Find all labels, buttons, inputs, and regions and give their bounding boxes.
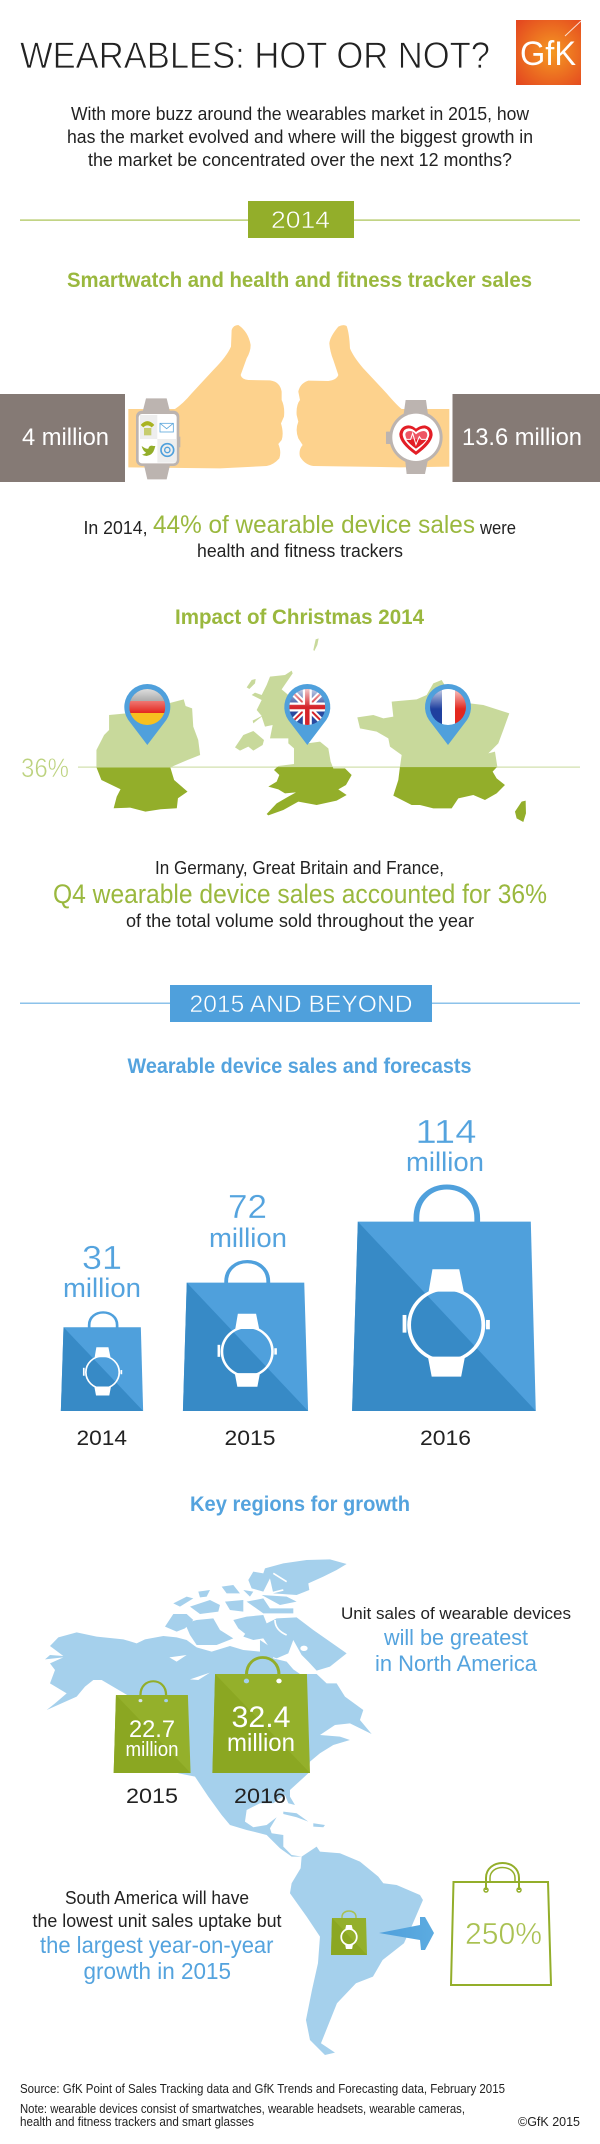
icon: right hand xyxy=(297,325,449,467)
bag: 32.4 million 2016: 2016 xyxy=(234,1785,286,1808)
bag: 22.7 million 2015: 22.7 xyxy=(129,1716,175,1743)
logo: GfK xyxy=(516,20,581,85)
label box: 13.6 million: 13.6 million xyxy=(462,424,582,451)
callout: 250% outline bag xyxy=(451,1863,551,1985)
text: South America callout: growth in 2015 xyxy=(84,1958,231,1984)
text: North America callout: will be greatest xyxy=(383,1625,528,1650)
intro text: With more buzz around the wearables market in 2015, how xyxy=(71,104,530,124)
icon: small bag with watch xyxy=(331,1911,367,1955)
label box: 4 million: 4 million xyxy=(22,424,109,451)
icon: at sign xyxy=(161,444,174,456)
text: Q4 sales statement xyxy=(53,858,547,931)
bag: 2014: 31 xyxy=(82,1239,122,1276)
bag: 2016 xyxy=(352,1113,536,1450)
text: North America callout: in North America xyxy=(375,1651,538,1676)
text: North America callout xyxy=(341,1604,571,1676)
text: South America callout: the lowest unit sales uptake but xyxy=(32,1911,282,1931)
icon: mail xyxy=(160,423,173,432)
bag: 2014 xyxy=(61,1239,143,1450)
text: 44% of wearable device sales xyxy=(84,511,516,561)
icon: heart xyxy=(399,425,433,455)
bag: 32.4 million 2016 xyxy=(212,1657,310,1808)
heading: smartwatch sales: Smartwatch and health and fitness tracker sales xyxy=(67,269,532,292)
intro text xyxy=(67,104,533,170)
bag: 2015: million xyxy=(209,1223,287,1253)
bag: 32.4 million 2016: 32.4 xyxy=(232,1701,290,1734)
text: South America callout xyxy=(32,1888,282,1984)
intro text: has the market evolved and where will the biggest growth in xyxy=(67,127,533,147)
icon: France pin xyxy=(425,684,471,745)
text: Q4 sales statement: of the total volume sold throughout the year xyxy=(126,911,474,931)
text: South America callout: South America will have xyxy=(65,1888,249,1908)
bag: 2016: 2016 xyxy=(420,1427,471,1450)
section banner: 2015 and beyond xyxy=(170,985,432,1022)
bag: 32.4 million 2016: million xyxy=(227,1729,295,1757)
bag: 22.7 million 2015: million xyxy=(126,1739,178,1761)
arrow xyxy=(379,1917,434,1950)
footer: source and note xyxy=(20,2082,580,2129)
icon: left hand xyxy=(128,325,284,468)
bag: 2014: million xyxy=(63,1273,141,1303)
section banner: 2014 xyxy=(248,201,354,238)
map: Germany xyxy=(96,699,200,812)
icon: smartwatch xyxy=(136,398,180,479)
bag: 2015: 2015 xyxy=(224,1427,276,1450)
heading: key regions: Key regions for growth xyxy=(190,1493,410,1516)
panel: right thumbs up with fitness tracker xyxy=(297,325,600,482)
title: WEARABLES: HOT OR NOT? xyxy=(20,35,490,76)
text: 44% of wearable device sales: were xyxy=(479,518,516,538)
icon: twitter xyxy=(142,446,155,456)
text: Q4 sales statement: In Germany, Great Britain and France, xyxy=(155,858,444,878)
footer: source and note: ©GfK 2015 xyxy=(518,2115,580,2129)
bag: 2016: 114 xyxy=(416,1113,476,1150)
bag: 22.7 million 2015: 2015 xyxy=(126,1785,178,1808)
text: South America callout: the largest year-on-year xyxy=(40,1932,274,1958)
map: Great Britain and Ireland xyxy=(235,638,352,815)
section banner: 2015 and beyond: 2015 AND BEYOND xyxy=(190,991,412,1018)
heading: impact of Christmas: Impact of Christmas 2014 xyxy=(175,606,424,629)
section banner: 2014: 2014 xyxy=(271,207,330,234)
label box: 4 million xyxy=(0,394,125,482)
text: North America callout: Unit sales of wearable devices xyxy=(341,1604,571,1623)
chart: shopping bags xyxy=(61,1113,536,1450)
bag: 2015: 72 xyxy=(228,1188,267,1225)
intro text: the market be concentrated over the next 12 months? xyxy=(88,150,512,170)
panel: left thumbs up with smartwatch xyxy=(0,325,284,482)
icon: Germany pin xyxy=(124,684,170,745)
icon: UK pin xyxy=(284,684,330,745)
bag: 22.7 million 2015 xyxy=(114,1681,191,1808)
bag: 2016: million xyxy=(406,1147,484,1177)
callout: 250% outline bag: 250% xyxy=(465,1916,542,1951)
footer: source and note: Note: wearable devices consist of smartwatches, wearable headsets, wearable cameras, xyxy=(20,2102,465,2116)
footer: source and note: Source: GfK Point of Sales Tracking data and GfK Trends and Forecasting data, February 2015 xyxy=(20,2082,505,2096)
text: 44% of wearable device sales: health and fitness trackers xyxy=(197,541,403,561)
text: 44% of wearable device sales: In 2014, xyxy=(84,518,148,538)
footer: source and note: health and fitness trackers and smart glasses xyxy=(20,2115,254,2129)
text: Q4 sales statement: Q4 wearable device sales accounted for 36% xyxy=(53,879,547,909)
text: 44% of wearable device sales: 44% of wearable device sales xyxy=(153,511,475,539)
label box: 13.6 million xyxy=(452,394,600,482)
map: the Americas xyxy=(45,1559,423,2055)
heading: sales and forecasts: Wearable device sales and forecasts xyxy=(128,1055,472,1078)
icon: heart-rate watch xyxy=(386,400,443,474)
bag: 2015 xyxy=(183,1188,308,1450)
icon: phone xyxy=(141,421,154,435)
label: 36%: 36% xyxy=(21,753,69,783)
map: France xyxy=(357,680,526,822)
bag: 2014: 2014 xyxy=(76,1427,127,1450)
logo: GfK: GfK xyxy=(520,35,576,73)
chart: 36% country maps xyxy=(21,638,580,822)
